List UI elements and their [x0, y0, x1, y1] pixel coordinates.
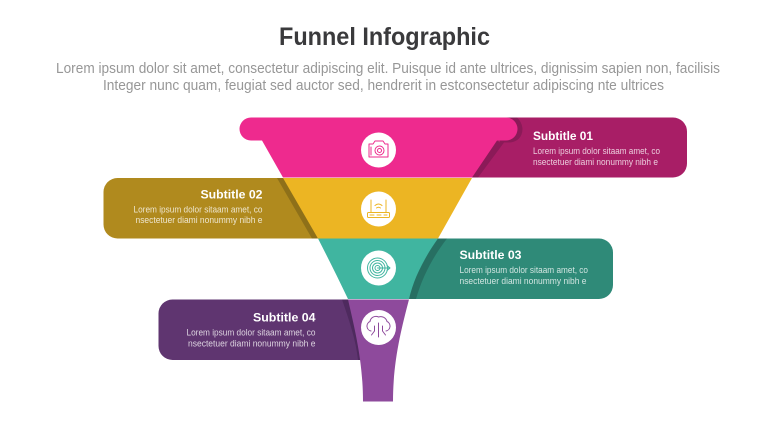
icon: camera [361, 132, 396, 168]
panel: subtitle 01: Subtitle 01 [533, 129, 593, 143]
panel: subtitle 03: Lorem ipsum dolor sitaam amet, co [460, 265, 588, 275]
panel: subtitle 01: nsectetuer diami nonummy nibh e [533, 157, 658, 167]
funnel segment: yellow [283, 178, 472, 238]
funnel segment: purple [348, 300, 409, 402]
panel: subtitle 01 [440, 118, 687, 178]
panel: subtitle 03: nsectetuer diami nonummy nibh e [460, 276, 586, 286]
panel: subtitle 03: Subtitle 03 [460, 248, 522, 262]
panel: subtitle 02: Subtitle 02 [200, 188, 263, 202]
icon: target [361, 250, 396, 286]
description text: Integer nunc quam, feugiat sed auctor sed, hendrerit in estconsectetur adipiscing nte ultrices [103, 78, 664, 94]
title: Funnel Infographic [279, 23, 490, 51]
panel: subtitle 02: Lorem ipsum dolor sitaam amet, co [134, 204, 262, 214]
panel: subtitle 03 [390, 238, 613, 299]
panel: subtitle 04: Subtitle 04 [253, 310, 316, 324]
funnel segment: teal [318, 238, 438, 299]
description text: Lorem ipsum dolor sit amet, consectetur adipiscing elit. Puisque id ante ultrices, dignissim sapien non, facilisis [56, 61, 720, 77]
panel: subtitle 04 [158, 300, 378, 360]
panel: subtitle 04: nsectetuer diami nonummy nibh e [188, 338, 316, 348]
panel: subtitle 02 [104, 178, 344, 238]
description text [56, 61, 720, 94]
panel: subtitle 04: Lorem ipsum dolor sitaam amet, co [186, 328, 316, 338]
panel: subtitle 01: Lorem ipsum dolor sitaam amet, co [533, 146, 660, 156]
icon: wifi router [361, 192, 396, 226]
panel: subtitle 02: nsectetuer diami nonummy nibh e [136, 215, 262, 225]
funnel segment: pink [240, 118, 518, 178]
icon: cloud network [361, 310, 396, 345]
